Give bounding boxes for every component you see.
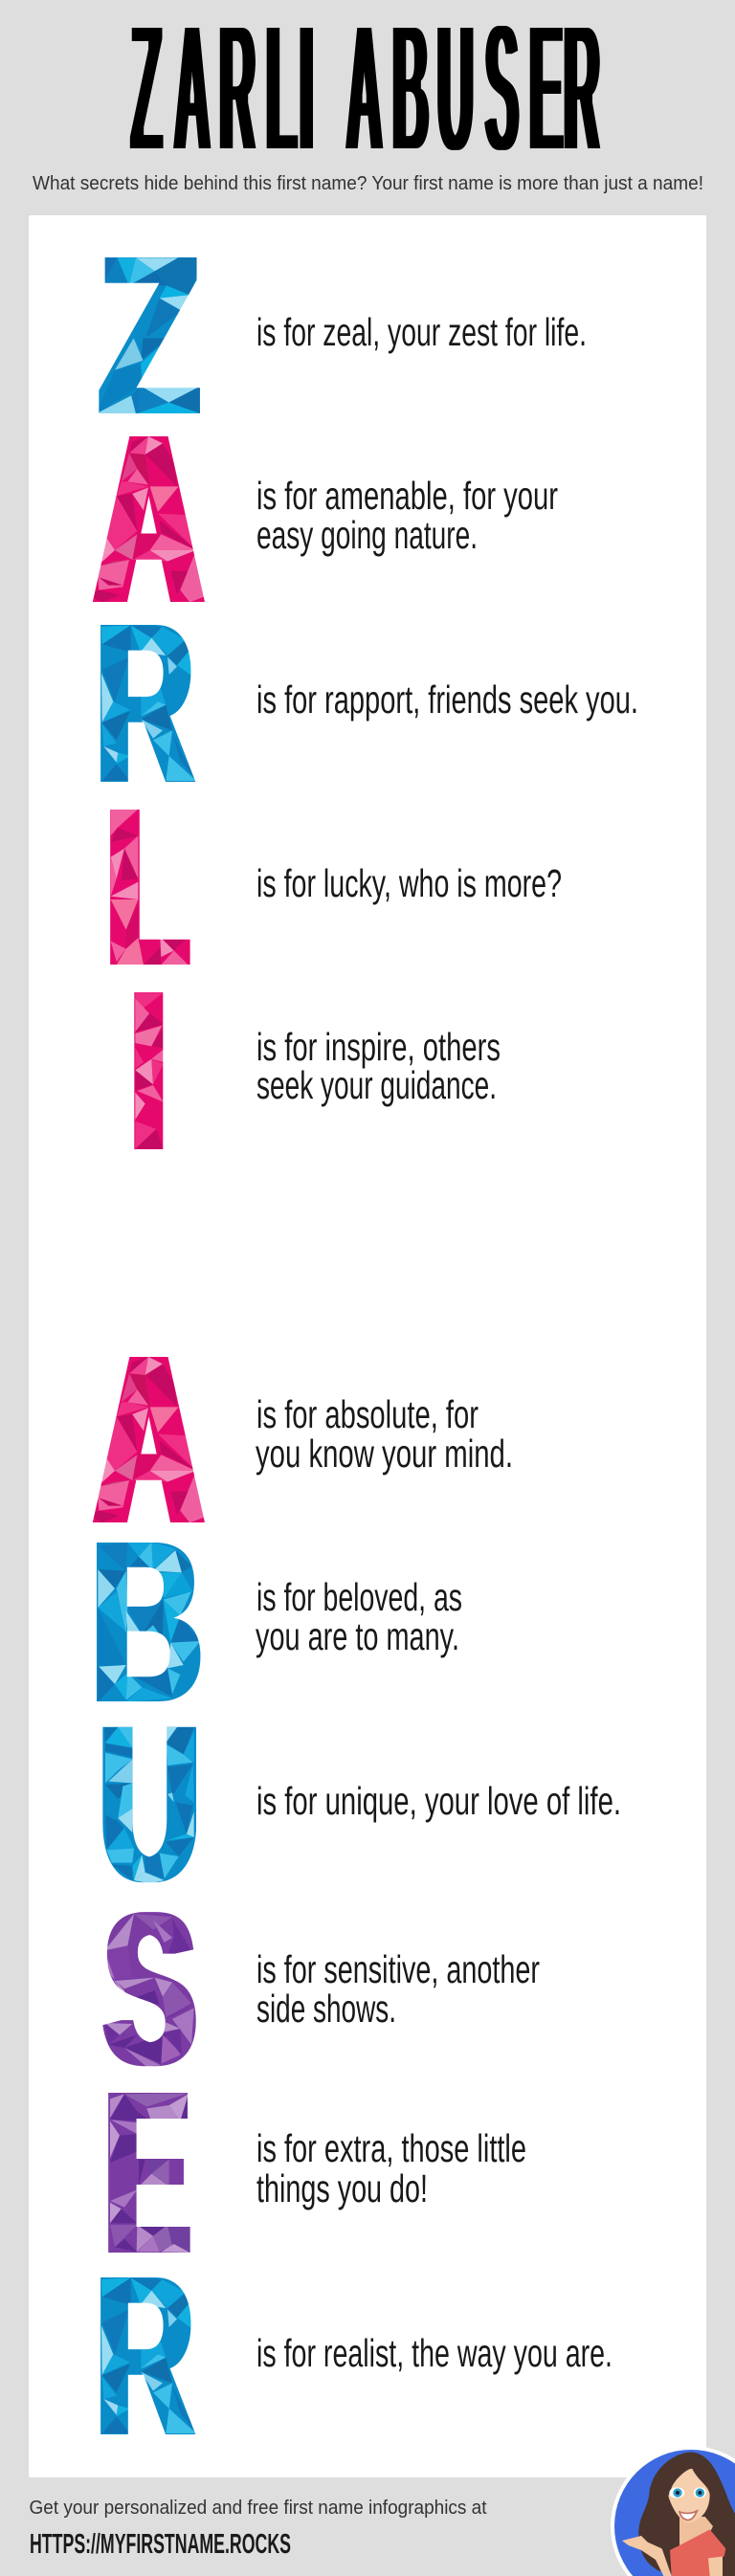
footer text: url: HTTPS://MYFIRSTNAME.ROCKS bbox=[30, 2529, 291, 2560]
text: E line: is for extra, those little bbox=[256, 2126, 526, 2170]
text: A line (second word) bbox=[256, 1392, 513, 1476]
letter icon: B bbox=[96, 1541, 202, 1703]
letter icon: A (second word) bbox=[92, 1357, 205, 1522]
text: I line bbox=[256, 1025, 501, 1107]
text: A line bbox=[256, 474, 558, 557]
letter icon: I bbox=[134, 992, 163, 1149]
text: I line: seek your guidance. bbox=[256, 1063, 497, 1107]
text: L line: is for lucky, who is more? bbox=[256, 861, 562, 905]
text: A line: easy going nature. bbox=[256, 513, 478, 557]
text: E line bbox=[256, 2126, 526, 2210]
text: A line (second word): is for absolute, for bbox=[256, 1392, 479, 1436]
icon: avatar of woman in circle bbox=[611, 2446, 735, 2576]
letter icon: R (second word) bbox=[100, 2276, 199, 2436]
text: Z line: is for zeal, your zest for life. bbox=[256, 310, 587, 354]
text: S line: is for sensitive, another bbox=[256, 1947, 540, 1991]
text: B line bbox=[256, 1575, 462, 1658]
text: I line: is for inspire, others bbox=[256, 1025, 501, 1069]
letter icon: E bbox=[107, 2091, 191, 2254]
letter icon: Z bbox=[99, 257, 200, 413]
letter icon: L bbox=[109, 808, 190, 966]
footer text: invitation: Get your personalized and free first name infographics at bbox=[29, 2498, 487, 2519]
text: S line bbox=[256, 1947, 540, 2031]
subtitle: What secrets hide behind this first name? Your first name is more than just a name! bbox=[33, 173, 703, 194]
text: S line: side shows. bbox=[256, 1987, 396, 2031]
text: B line: is for beloved, as bbox=[256, 1575, 462, 1619]
text: E line: things you do! bbox=[256, 2166, 428, 2210]
text: B line: you are to many. bbox=[256, 1614, 459, 1658]
text: A line (second word): you know your mind. bbox=[256, 1432, 513, 1476]
letter icon: U bbox=[102, 1725, 196, 1885]
letter icon: A bbox=[92, 436, 205, 602]
letter icon: S bbox=[102, 1909, 196, 2069]
text: A line: is for amenable, for your bbox=[256, 474, 558, 518]
letter icon: R bbox=[100, 623, 199, 784]
